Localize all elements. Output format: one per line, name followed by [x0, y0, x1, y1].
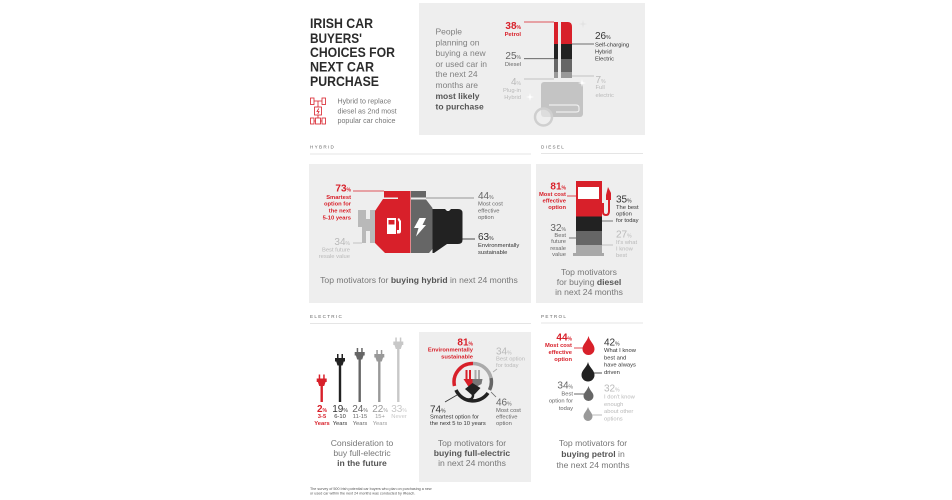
stat: 81%	[539, 182, 576, 211]
stat: 34%	[493, 346, 525, 372]
title: IRISH CAR	[310, 15, 373, 31]
stat: 42%: have always	[604, 362, 636, 368]
stat: 44%: 44%	[478, 191, 494, 202]
icon: fuel pump	[387, 218, 401, 234]
icon: lightning bolt	[414, 218, 426, 236]
stat: 32%: options	[604, 416, 623, 422]
caption: diesel	[555, 267, 623, 297]
stat: 34%: 34%	[496, 346, 512, 358]
plug: never	[393, 338, 403, 402]
icon: diesel pump	[573, 181, 611, 256]
stat: 27%: best	[616, 253, 627, 259]
stat: 44%: option	[554, 357, 572, 363]
stat: 81%: Environmentally	[428, 348, 474, 354]
icon: hybrid chassis	[310, 98, 326, 124]
caption: electric motivators	[434, 438, 510, 468]
caption: petrol	[556, 438, 630, 470]
stat: 63%	[462, 232, 519, 256]
icon: gear stick and key	[526, 20, 587, 126]
caption: electric motivators: buying full-electric	[434, 448, 510, 458]
footnote	[310, 487, 432, 496]
stat: 34%: resale value	[319, 254, 350, 260]
stat: self-charging hybrid: Hybrid	[595, 50, 612, 56]
intro text: months are	[436, 80, 478, 90]
subtitle text: popular car choice	[338, 117, 396, 125]
caption: petrol: Top motivators for	[559, 438, 627, 448]
stat: 32%: about other	[604, 409, 633, 415]
stat: 34%: 34%	[334, 237, 351, 248]
heading: electric: ELECTRIC	[310, 314, 343, 319]
stat: 35%: option	[616, 212, 632, 218]
stat: 63%: Environmentally	[478, 243, 519, 249]
stat: 35%	[602, 194, 639, 224]
stat: 81%	[428, 338, 474, 360]
stat: plug-in hybrid: 4%	[511, 77, 522, 88]
panel: most likely to purchase	[419, 3, 645, 135]
caption: petrol: the next 24 months	[556, 460, 630, 470]
stat: 44%	[545, 332, 583, 363]
caption: electric future: in the future	[337, 458, 387, 468]
stat: 46%: effective	[496, 414, 517, 420]
subtitle text	[338, 98, 397, 125]
labels: plug stats: 24%	[352, 404, 368, 415]
heading: diesel	[541, 144, 643, 154]
stat: 27%	[602, 230, 637, 259]
labels: plug stats: Never	[391, 414, 407, 420]
stat: 32%: enough	[604, 402, 623, 408]
caption: electric motivators: Top motivators for	[438, 438, 506, 448]
stat: 42%: What I know	[604, 348, 637, 354]
labels: plug stats: 15+	[375, 414, 386, 420]
stat: 73%: the next	[329, 208, 351, 214]
stat: 74%: Smartest option for	[430, 414, 479, 420]
stat: 73%: 73%	[335, 184, 352, 194]
stat: petrol: Petrol	[505, 32, 521, 38]
stat: 74%	[430, 395, 486, 427]
labels: plug stats: 19%	[332, 404, 348, 415]
stat: 34%: today	[559, 406, 573, 412]
stat: 81%: effective	[542, 198, 567, 204]
intro text	[436, 26, 487, 112]
stat: 35%: The best	[616, 205, 639, 211]
stat: 32%: value	[552, 252, 566, 258]
labels: plug stats: Years	[353, 421, 367, 427]
labels: plug stats: 2%	[317, 404, 328, 415]
stat: plug-in hybrid: Plug-in	[503, 88, 521, 94]
panel: petrol	[545, 332, 637, 470]
caption: diesel: for buying diesel	[557, 277, 621, 287]
stat: 74%: 74%	[430, 404, 446, 416]
intro text: or used car in	[436, 59, 487, 69]
icon: black drop	[582, 362, 594, 382]
stat: 44%: option	[478, 215, 494, 221]
subtitle text: diesel as 2nd most	[338, 108, 397, 116]
subtitle text: Hybrid to replace	[338, 98, 391, 106]
stat: 46%	[491, 392, 521, 427]
title: CHOICES FOR	[310, 44, 395, 60]
heading: diesel: DIESEL	[541, 144, 565, 150]
stat: 42%: 42%	[604, 338, 620, 348]
labels: plug stats: Years	[333, 421, 347, 427]
stat: petrol: 38%	[505, 21, 522, 32]
stat: 81%: 81%	[457, 338, 474, 348]
labels: plug stats: Years	[373, 421, 387, 427]
stat: self-charging hybrid: Electric	[595, 56, 614, 62]
labels: plug stats: 6-10	[334, 414, 346, 420]
plug: 11-15 years	[355, 348, 365, 402]
caption: petrol: buying petrol in	[561, 449, 625, 459]
stat: 81%: Most cost	[539, 192, 566, 198]
caption: electric future	[331, 438, 394, 468]
footnote: or used car within the next 24 months was conducted by iReach.	[310, 492, 415, 496]
stat: plug-in hybrid	[503, 77, 554, 101]
stat: diesel	[505, 51, 554, 68]
chart: plugs future consideration	[317, 338, 403, 402]
title: NEXT CAR	[310, 58, 374, 74]
icon: dark gray drop	[584, 386, 594, 401]
caption: electric motivators: in next 24 months	[438, 458, 506, 468]
stat: 63%: sustainable	[478, 250, 507, 256]
plug: 6-10 years	[335, 354, 345, 402]
stat: 46%: option	[496, 421, 512, 427]
stat: 44%	[426, 191, 503, 221]
stat: 73%: Smartest	[326, 195, 351, 201]
stat: 32%: resale	[550, 246, 566, 252]
stat: petrol	[505, 21, 554, 38]
panel: electric motivators	[419, 332, 531, 482]
footnote: The survey of 500 Irish potential car buyers who plan on purchasing a new	[310, 487, 432, 491]
stat: full electric: electric	[596, 93, 614, 99]
stat: 42%: driven	[604, 370, 620, 376]
stat: 81%: sustainable	[441, 354, 474, 360]
stat: 46%: 46%	[496, 398, 512, 408]
icon: engine	[358, 191, 462, 253]
labels: plug stats: 22%	[372, 404, 388, 415]
intro text: most likely	[436, 91, 480, 101]
heading: petrol: PETROL	[541, 314, 567, 319]
stat: full electric	[572, 75, 614, 99]
icon: plug ring	[454, 363, 491, 401]
stat: 27%: I know	[616, 246, 634, 252]
stat: 46%: Most cost	[496, 408, 521, 414]
stat: 73%: option for	[324, 202, 352, 208]
labels: plug stats: 11-15	[353, 414, 367, 420]
stat: 34%: option for	[549, 398, 573, 404]
stat: 32%	[550, 223, 576, 258]
stat: full electric: Full	[596, 85, 605, 91]
title	[310, 15, 395, 89]
stat: 27%: 27%	[616, 230, 632, 240]
stat: 81%: 81%	[550, 182, 567, 192]
caption: electric future: Consideration to	[331, 438, 394, 448]
intro text: buying a new	[436, 48, 486, 58]
labels: plug stats: Years	[314, 421, 330, 427]
stat: diesel: 25%	[505, 51, 522, 62]
stat: 34%	[549, 380, 584, 412]
title: BUYERS'	[310, 30, 362, 46]
stat: 44%: effective	[548, 350, 573, 356]
caption: electric future: buy full-electric	[333, 448, 391, 458]
stat: diesel: Diesel	[505, 62, 521, 68]
stat: 44%: effective	[478, 208, 499, 214]
stat: 32%: future	[551, 239, 566, 245]
stat: 42%	[594, 338, 637, 376]
stat: 35%: for today	[616, 218, 639, 224]
stat: 73%: 5-10 years	[323, 216, 351, 222]
heading: hybrid: HYBRID	[310, 144, 335, 150]
plug: 3-5 years	[317, 374, 327, 402]
panel: diesel	[536, 164, 643, 303]
stat: 44%: Most cost	[545, 343, 572, 349]
stat: 32%: I don't know	[604, 394, 636, 400]
stat: 34%: Best	[561, 392, 573, 398]
icon: gray drop	[584, 407, 592, 421]
stat: 74%: the next 5 to 10 years	[430, 421, 486, 427]
intro text: to purchase	[436, 102, 484, 112]
stat: 44%: 44%	[556, 332, 573, 344]
stat: 73%	[323, 184, 384, 222]
stat: 34%: for today	[496, 363, 519, 369]
caption: diesel: in next 24 months	[555, 287, 623, 297]
caption: diesel: Top motivators	[561, 267, 617, 277]
stat: 44%: Most cost	[478, 202, 503, 208]
stat: 34%: 34%	[557, 380, 574, 392]
labels: plug stats: 33%	[391, 404, 407, 415]
labels: plug stats	[314, 404, 407, 427]
intro text: the next 24	[436, 69, 478, 79]
panel: hybrid	[309, 164, 531, 303]
stat: 81%: option	[548, 205, 566, 211]
plug: 15+ years	[374, 350, 384, 402]
title: PURCHASE	[310, 73, 379, 89]
stat: self-charging hybrid: Self-charging	[595, 42, 629, 48]
stat: plug-in hybrid: Hybrid	[504, 95, 521, 101]
stat: 27%: It's what	[616, 240, 637, 246]
caption: hybrid: Top motivators for buying hybrid in next 24 months	[320, 275, 518, 285]
stat: 42%: best and	[604, 356, 626, 362]
stat: 32%: Best	[554, 233, 566, 239]
stat: 32%	[592, 384, 636, 422]
labels: plug stats: 3-5	[318, 414, 327, 420]
icon: red drop	[582, 336, 594, 355]
stat: 34%: Best future	[322, 248, 350, 254]
stat: 63%: 63%	[478, 232, 494, 243]
intro text: People	[436, 26, 462, 36]
stat: full electric: 7%	[596, 75, 606, 86]
stat: 32%: 32%	[550, 223, 567, 234]
heading: petrol	[541, 314, 643, 323]
stat: 35%: 35%	[616, 194, 632, 206]
intro text: planning on	[436, 38, 480, 48]
stat: 34%: Best option	[496, 356, 525, 362]
stat: self-charging hybrid: 26%	[595, 31, 611, 42]
stat: 32%: 32%	[604, 384, 620, 394]
stat: self-charging hybrid	[572, 31, 629, 62]
stat: 34%	[319, 237, 362, 260]
